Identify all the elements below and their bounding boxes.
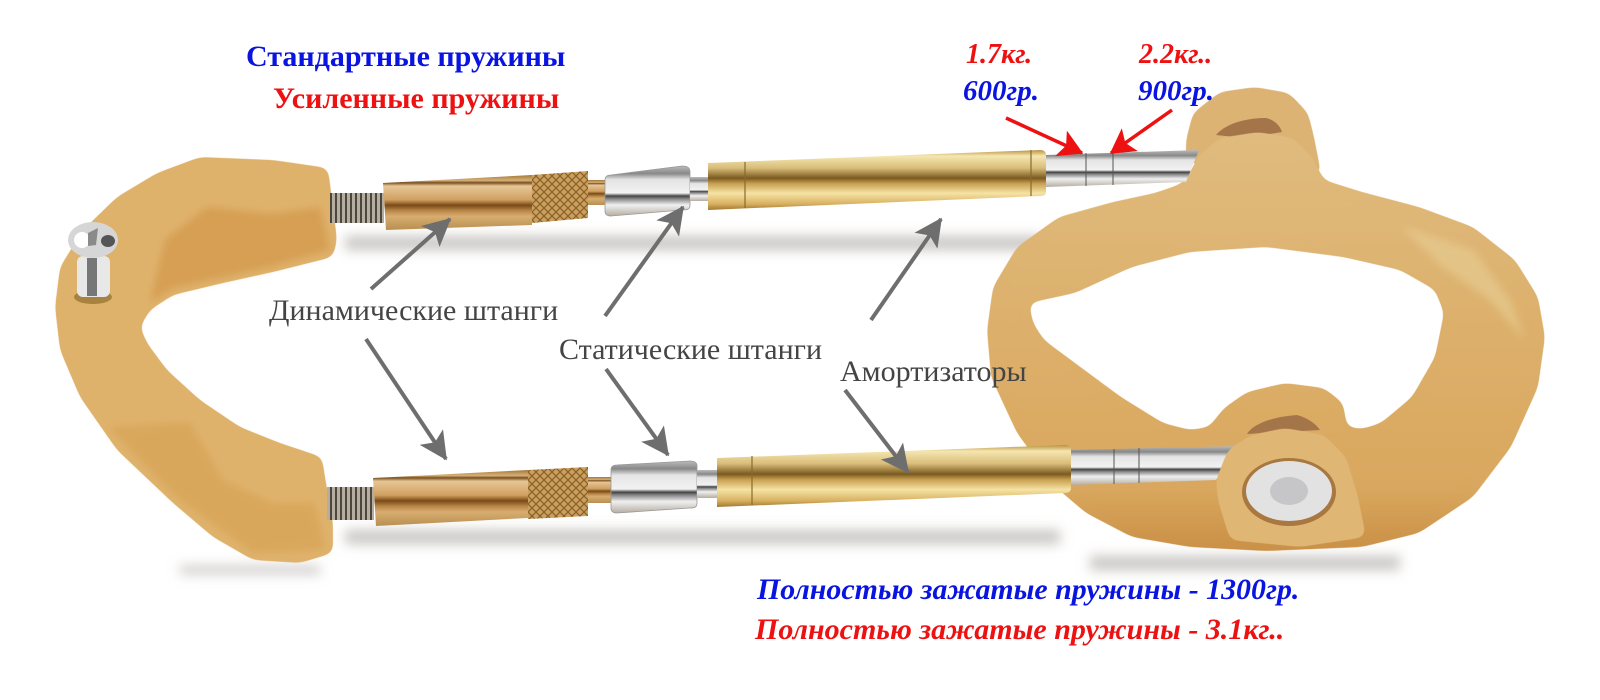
- red arrows: [1006, 110, 1172, 153]
- static rod: [605, 166, 690, 216]
- label: 1.7 kg: 1.7кг.: [966, 39, 1032, 70]
- note: standard fully compressed: Полностью зажатые пружины - 1300гр.: [756, 573, 1299, 606]
- lower front clamp: [1216, 428, 1366, 547]
- arrow: 2.2 kg mark: [1111, 110, 1172, 153]
- grey arrows: [366, 207, 941, 472]
- label: 2.2 kg: 2.2кг..: [1138, 39, 1212, 70]
- knurled grip: [528, 467, 588, 519]
- dynamic rod sleeve: [383, 175, 532, 230]
- arrow: dynamic down: [366, 339, 446, 459]
- steel shaft: [1071, 446, 1240, 485]
- label: dynamic rods: Динамические штанги: [269, 294, 558, 327]
- arrow: static down: [606, 369, 668, 455]
- heading: reinforced springs: Усиленные пружины: [273, 82, 559, 115]
- dynamic rod sleeve: [373, 470, 528, 526]
- arrow: absorber down: [845, 390, 908, 472]
- shock absorber: [708, 150, 1046, 210]
- lower rod: [327, 445, 1240, 526]
- arrow: dynamic up: [371, 219, 450, 289]
- upper rod: [330, 150, 1199, 230]
- handle lower facet: [108, 422, 326, 553]
- handle top facet: [150, 207, 330, 303]
- icon: rivet: [68, 222, 118, 304]
- steel shaft: [1046, 150, 1199, 187]
- static rod: [611, 461, 697, 513]
- heading: standard springs: Стандартные пружины: [246, 40, 565, 73]
- label: static rods: Статические штанги: [559, 333, 822, 366]
- arrow: static up: [605, 207, 683, 316]
- shock absorber: [717, 445, 1071, 507]
- thread: [327, 487, 374, 520]
- knurled grip: [532, 171, 588, 223]
- label: shock absorbers: Амортизаторы: [840, 355, 1027, 388]
- note: reinforced fully compressed: Полностью зажатые пружины - 3.1кг..: [754, 613, 1284, 646]
- label: 900 g: 900гр.: [1138, 75, 1214, 107]
- thread: [330, 193, 384, 223]
- ring body: [987, 132, 1545, 551]
- top knob: [1186, 87, 1322, 178]
- icon: silver disc: [1242, 458, 1336, 526]
- left handle: [55, 157, 337, 563]
- right handle: [987, 87, 1545, 551]
- arrow: absorber up: [871, 219, 941, 320]
- arrow: 1.7 kg mark: [1006, 118, 1082, 153]
- label: 600 g: 600гр.: [963, 75, 1039, 107]
- lower knob copper: [1247, 415, 1320, 434]
- ring highlight: [1400, 225, 1525, 340]
- shadows under the rods: [180, 236, 1400, 574]
